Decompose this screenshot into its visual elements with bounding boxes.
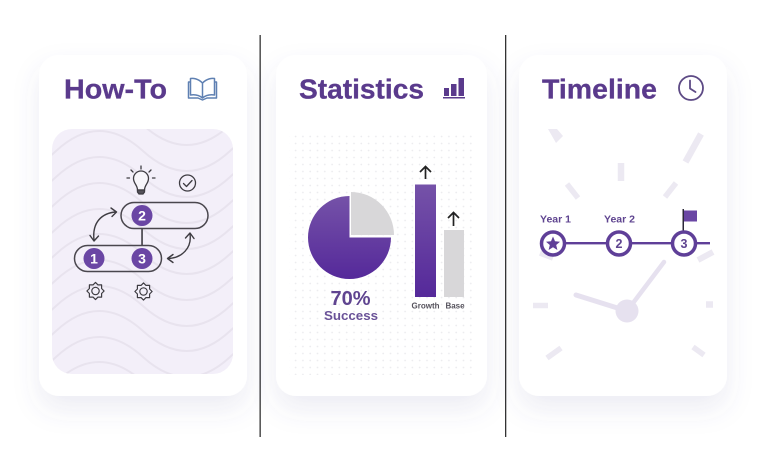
arrow: double curved right — [168, 233, 194, 262]
label: Year 1: Year 1 — [540, 214, 571, 226]
label: Year 2: Year 2 — [604, 214, 635, 226]
label: Base: Base — [445, 302, 465, 310]
flow step 2 pill — [121, 202, 208, 228]
label: 70% Success: 70% — [330, 288, 371, 310]
bar: Base — [444, 230, 464, 297]
dotted background — [289, 132, 475, 375]
panel: statistics — [276, 55, 487, 396]
flow steps 1 and 3 pill — [74, 246, 162, 272]
background clock face — [533, 129, 713, 358]
timeline line — [553, 242, 710, 244]
icon: book — [188, 78, 216, 100]
heading: Timeline: Timeline — [542, 74, 657, 104]
icon: bars — [443, 78, 465, 98]
pie chart — [308, 192, 394, 279]
connector — [141, 228, 143, 246]
flow steps 1 and 3 pill: 1 — [90, 250, 98, 266]
heading: How-To: How-To — [64, 74, 167, 104]
icon: check circle — [180, 175, 196, 191]
icon: clock — [679, 76, 703, 100]
label: Growth: Growth — [412, 302, 440, 310]
label: 70% Success — [324, 288, 378, 323]
bar: Growth — [415, 184, 436, 297]
flow step 2 pill: 2 — [138, 208, 146, 224]
milestone: 3: 3 — [681, 237, 688, 251]
milestone: 2 — [608, 232, 630, 255]
arrow: double curved left — [90, 208, 116, 241]
icon: flag — [682, 209, 697, 233]
panel: how-to — [37, 78, 249, 411]
divider right — [505, 35, 506, 437]
illustration panel with waves — [52, 129, 233, 374]
divider left — [260, 35, 261, 437]
flow steps 1 and 3 pill: 3 — [138, 250, 146, 266]
milestone: 3 — [672, 232, 696, 255]
milestone: star — [542, 232, 564, 255]
panel: timeline — [519, 55, 727, 396]
label: 70% Success: Success — [324, 308, 378, 323]
arrow: base up — [448, 212, 459, 226]
arrow: growth up — [420, 166, 431, 179]
icon: gear right — [135, 283, 152, 300]
icon: gear left — [87, 282, 104, 300]
heading: Statistics: Statistics — [299, 74, 424, 104]
milestone: 2: 2 — [616, 237, 623, 251]
icon: light bulb — [127, 166, 155, 194]
